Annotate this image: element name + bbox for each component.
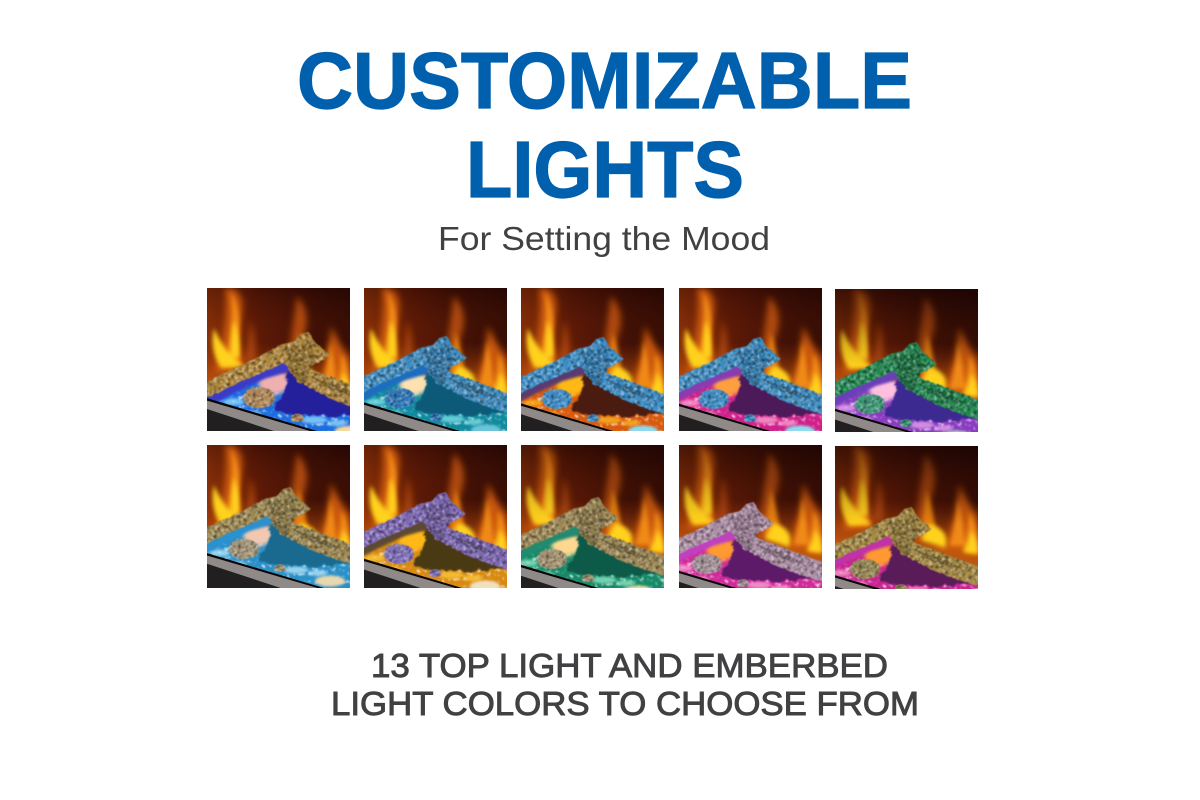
title: LIGHTS — [466, 125, 744, 214]
caption: LIGHT COLORS TO CHOOSE FROM — [331, 685, 919, 722]
swatch 6: khaki log, light blue ember — [207, 445, 350, 588]
subtitle: For Setting the Mood — [438, 220, 770, 257]
swatch 7: purple log, amber ember — [364, 445, 507, 588]
swatch 10: tan log, magenta ember — [835, 446, 978, 589]
title — [297, 36, 912, 214]
panel: color swatch grid — [207, 288, 978, 589]
swatch 3: blue log, orange ember — [521, 288, 664, 431]
swatch 9: mauve log, pink ember — [679, 445, 822, 588]
swatch 4: blue log, pink ember — [679, 288, 822, 431]
swatch 5: green log, purple ember — [835, 289, 978, 432]
caption: 13 TOP LIGHT AND EMBERBED — [371, 647, 888, 684]
caption — [331, 647, 919, 722]
swatch 2: blue log, teal ember — [364, 288, 507, 431]
swatch 8: khaki log, green ember — [521, 445, 664, 588]
swatch 1: gold log, blue ember — [207, 288, 350, 431]
title: CUSTOMIZABLE — [297, 36, 912, 125]
